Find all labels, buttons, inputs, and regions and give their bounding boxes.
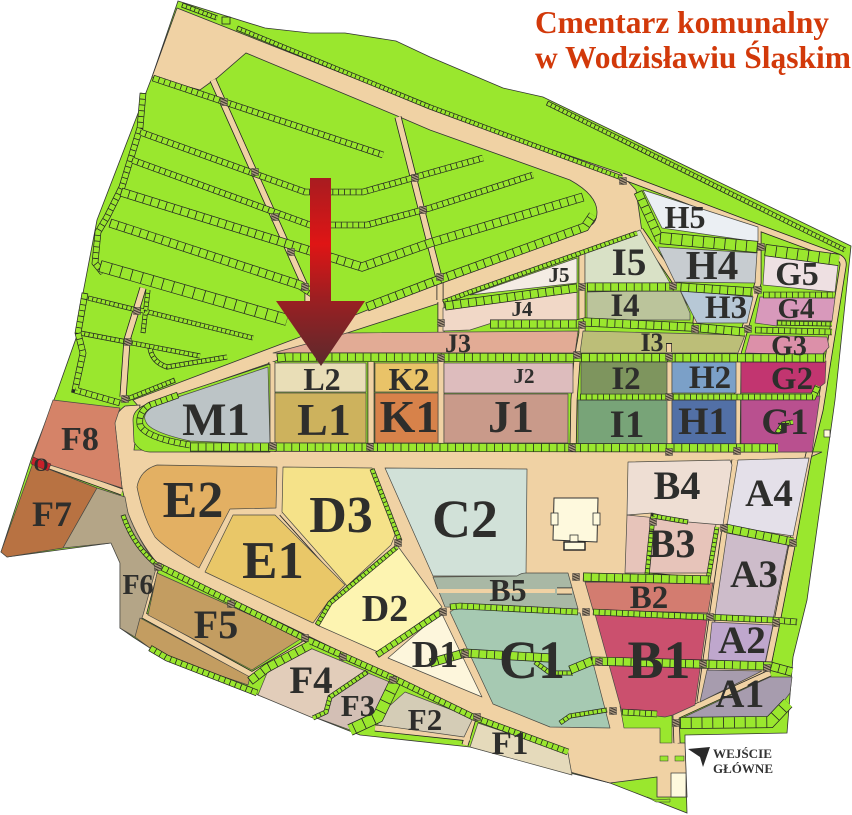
plot G2 [741, 361, 826, 393]
plot labels: K1 [380, 391, 438, 442]
plot E2 [137, 465, 277, 568]
plot labels: G5 [775, 256, 819, 293]
plot labels: I4 [610, 288, 640, 324]
plot labels: J2 [514, 364, 534, 388]
plot labels: B1 [627, 630, 691, 690]
plot B2 [585, 582, 713, 613]
main entrance label: WEJŚCIE [713, 747, 772, 761]
plot labels: D1 [412, 634, 458, 676]
plot labels: A4 [745, 472, 793, 515]
title: Cmentarz komunalny [535, 4, 829, 40]
main entrance label [713, 747, 773, 776]
plot labels: I1 [610, 403, 644, 446]
main entrance label: GŁÓWNE [713, 762, 773, 776]
plot A3 [715, 533, 788, 620]
plot G5 [763, 255, 838, 292]
plot labels: J1 [488, 391, 534, 442]
plot labels: I3 [640, 328, 664, 357]
title: w Wodzisławiu Śląskim [535, 39, 851, 75]
plot labels: J4 [512, 297, 533, 321]
plot A2 [708, 622, 773, 663]
plot F3 [317, 673, 392, 730]
plot labels: F1 [492, 726, 528, 762]
plot H5 [643, 190, 758, 242]
plot labels: F8 [61, 421, 99, 458]
plot labels: D2 [362, 588, 408, 630]
plot I1 [578, 400, 667, 447]
plot B4 [627, 460, 732, 525]
plot H3 [680, 290, 753, 323]
plot L1 [275, 393, 366, 443]
plot labels: D3 [309, 487, 373, 544]
plot labels: G3 [771, 331, 807, 362]
plot labels [32, 199, 819, 762]
plot labels: F3 [341, 688, 375, 723]
road lines across plots [433, 343, 669, 591]
icon: main entrance pointer [688, 747, 710, 767]
plot L2 [275, 363, 366, 392]
plot B3 [625, 515, 716, 573]
plot I4 [587, 290, 690, 320]
plot I2 [581, 362, 667, 395]
plot G1 [741, 396, 820, 452]
plot M1 with green surround [133, 364, 270, 452]
arrow pointing at plot L2 [276, 178, 365, 366]
plot labels: B4 [654, 463, 700, 508]
plot D2 [317, 545, 442, 652]
plot labels: C1 [499, 630, 565, 690]
plot C2 [385, 468, 527, 576]
small square near the north gate [222, 17, 230, 24]
plot labels: H1 [678, 400, 728, 443]
plot labels: H2 [689, 360, 731, 396]
plot labels: O [34, 455, 48, 476]
plot F6 [63, 488, 157, 637]
plot I3 [580, 331, 745, 353]
plots [1, 190, 838, 775]
plot F2 [377, 692, 473, 737]
plot F5 [135, 573, 302, 685]
plot labels: G1 [761, 402, 809, 443]
plot labels: M1 [182, 394, 250, 446]
plot B5 [433, 573, 578, 609]
plot labels: G4 [777, 293, 815, 325]
plot labels: A3 [730, 553, 778, 596]
road crossings [122, 98, 796, 726]
gatehouse [647, 756, 686, 802]
plot D1 [388, 612, 482, 697]
plot labels: F7 [32, 494, 72, 534]
plot labels: A1 [716, 671, 764, 716]
plot labels: E1 [242, 532, 304, 590]
plot labels: L1 [297, 394, 351, 445]
road network lines [50, 80, 843, 745]
plot J3 [273, 331, 578, 353]
plot labels: F6 [122, 570, 154, 601]
plot labels: H4 [686, 242, 738, 288]
plot labels: L2 [303, 361, 341, 397]
plot D3 [282, 467, 395, 586]
plot A4 [727, 458, 809, 536]
plot A1 [682, 670, 792, 718]
plot H2 [672, 362, 736, 393]
red marker on the F7/F8 boundary [31, 457, 51, 471]
plot K2 [375, 363, 438, 392]
plot J2 [444, 363, 573, 393]
plot B1 [595, 614, 707, 717]
plot labels: F2 [408, 702, 442, 737]
plot H1 [672, 400, 736, 447]
plot G4 [755, 297, 835, 326]
plot labels: K2 [389, 361, 429, 397]
green patch below plot B1 [620, 706, 672, 743]
plot F8 [33, 400, 122, 488]
plot F4 [258, 648, 368, 718]
plot labels: B2 [630, 580, 668, 616]
plot labels: F4 [289, 659, 333, 702]
plot labels: B5 [489, 572, 527, 608]
plot labels: A2 [718, 619, 766, 662]
plot labels: G2 [771, 361, 813, 397]
plot labels: H3 [705, 290, 747, 326]
plot F7 [1, 463, 97, 557]
plot labels: C2 [432, 489, 498, 549]
small white marker on the eastern edge [824, 430, 830, 437]
plot labels: F5 [194, 602, 238, 647]
plot H4 [658, 247, 757, 283]
plot F1 [470, 723, 572, 775]
plot C1 [450, 607, 610, 728]
plot labels: H5 [665, 199, 705, 235]
plot K1 [375, 393, 438, 443]
plot labels: E2 [163, 472, 223, 529]
plot labels: I2 [611, 361, 641, 397]
plot labels: I5 [612, 241, 646, 284]
plot labels: B3 [649, 521, 695, 566]
title [535, 4, 851, 75]
plot I5 [585, 230, 670, 283]
chapel [551, 498, 600, 550]
plot J1 [444, 394, 568, 443]
plot G3 [745, 335, 829, 355]
plot labels: J3 [445, 329, 471, 358]
plot J4 [443, 292, 577, 331]
plot J5 [470, 258, 577, 295]
plot labels: J5 [548, 263, 570, 287]
plot E1 [205, 515, 345, 623]
